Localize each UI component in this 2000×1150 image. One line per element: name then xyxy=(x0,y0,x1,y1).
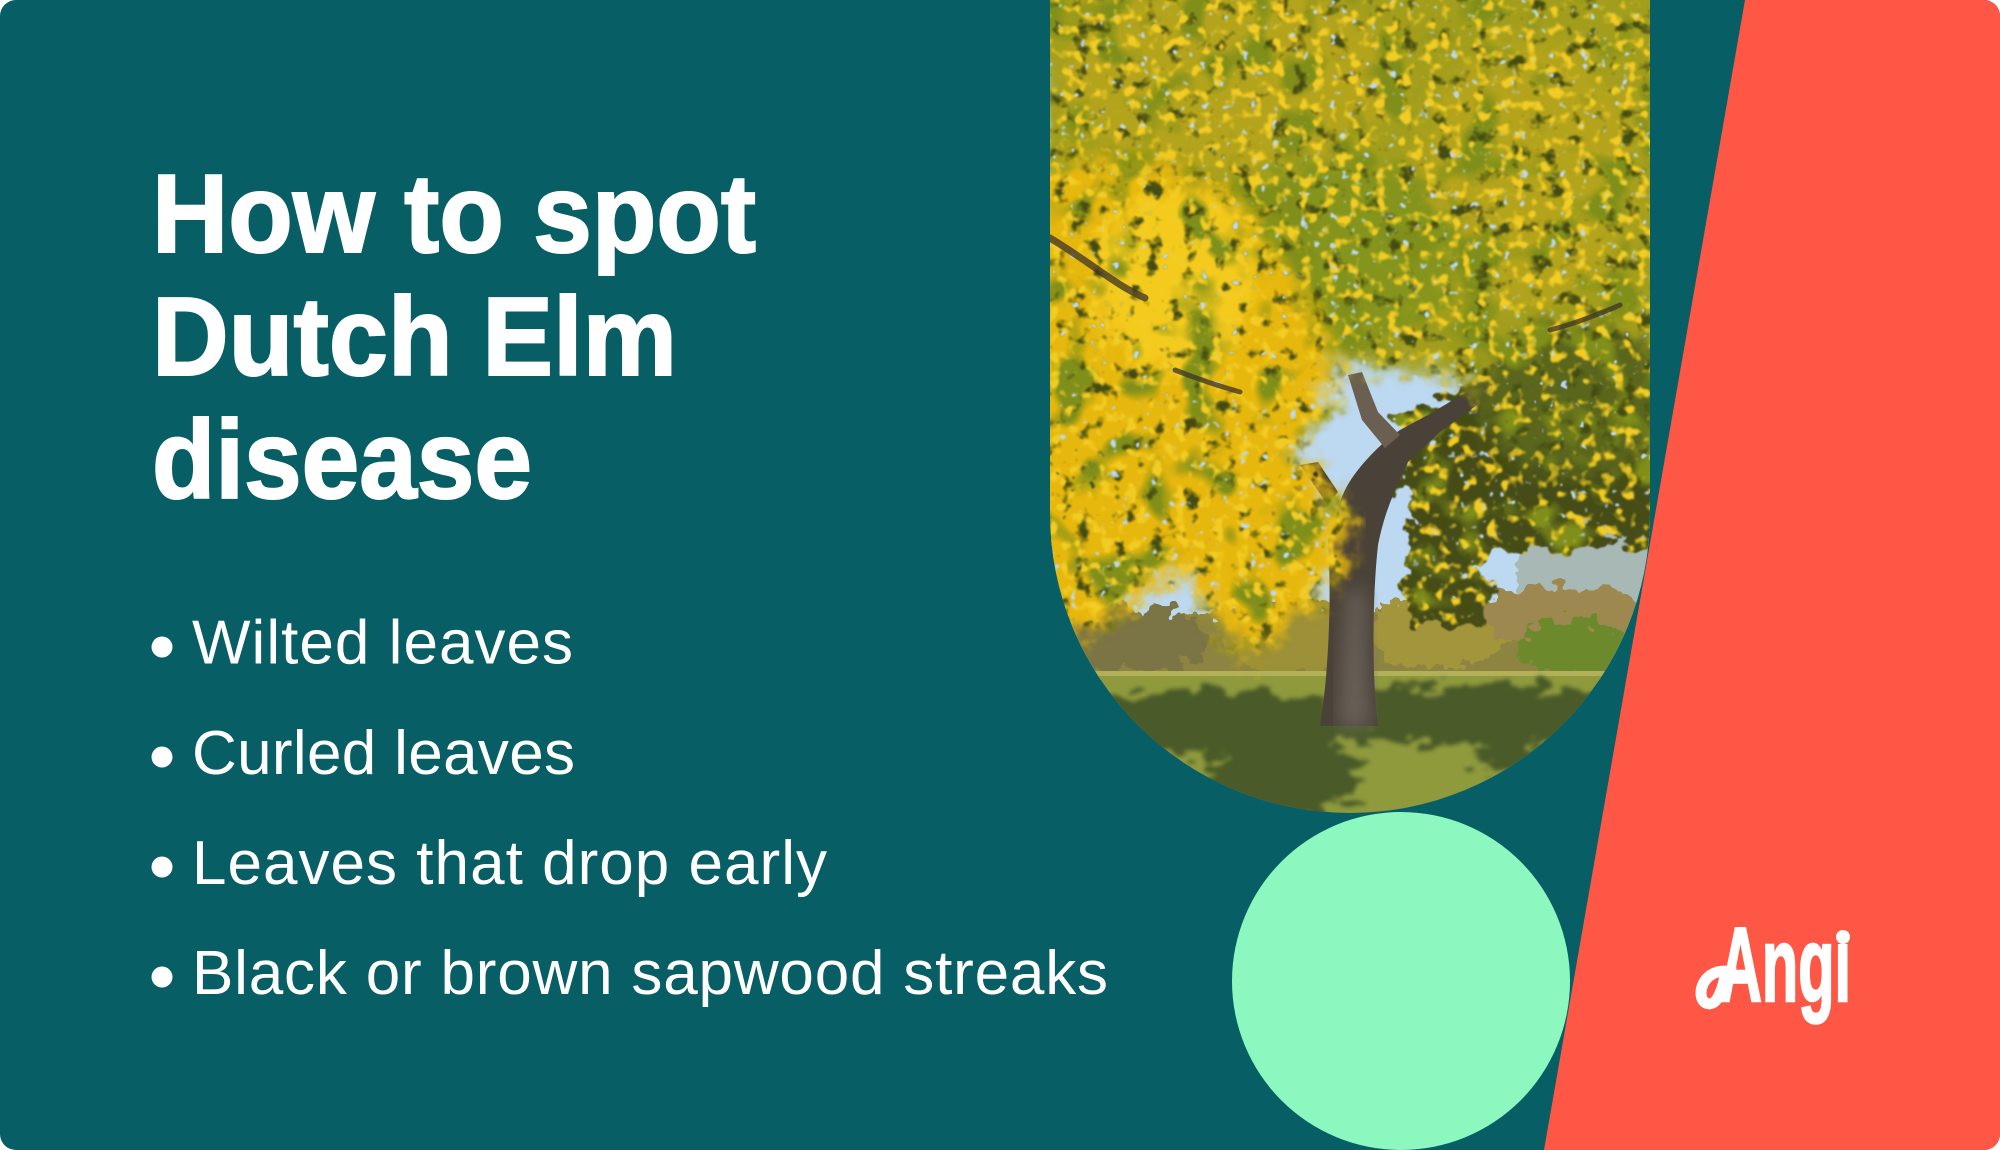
mint circle xyxy=(1232,812,1570,1150)
title: Dutch Elm xyxy=(152,275,677,399)
distant hazy tree xyxy=(1514,511,1650,606)
sky xyxy=(1050,0,1650,680)
visible branches through the leaves xyxy=(1050,238,1620,392)
back canopy: dark right side xyxy=(1392,300,1670,630)
lawn with shadows xyxy=(1095,671,1605,813)
title xyxy=(152,152,756,522)
symptom list xyxy=(152,608,1108,1008)
logo: Angi: Angi xyxy=(1719,906,1851,1024)
tree trunk and branches xyxy=(1300,372,1500,730)
title: How to spot xyxy=(152,152,756,276)
front foliage: bright yellow leaves on the left xyxy=(1030,160,1350,655)
coral diagonal panel xyxy=(1544,0,2000,1150)
bullet: early drop: Leaves that drop early xyxy=(192,829,827,898)
title: disease xyxy=(152,398,532,522)
logo: Angi xyxy=(1701,906,1854,1024)
background shrubs xyxy=(1040,585,1660,682)
photo: elm tree with yellowing leaves xyxy=(1027,0,1685,821)
bullet: sapwood streaks: Black or brown sapwood streaks xyxy=(192,939,1108,1008)
upper canopy: yellow-green foliage xyxy=(1030,0,1680,475)
dark green patch behind left foliage xyxy=(1050,448,1100,544)
bullet: wilted leaves: Wilted leaves xyxy=(192,608,573,678)
bullet: curled leaves: Curled leaves xyxy=(192,719,575,788)
